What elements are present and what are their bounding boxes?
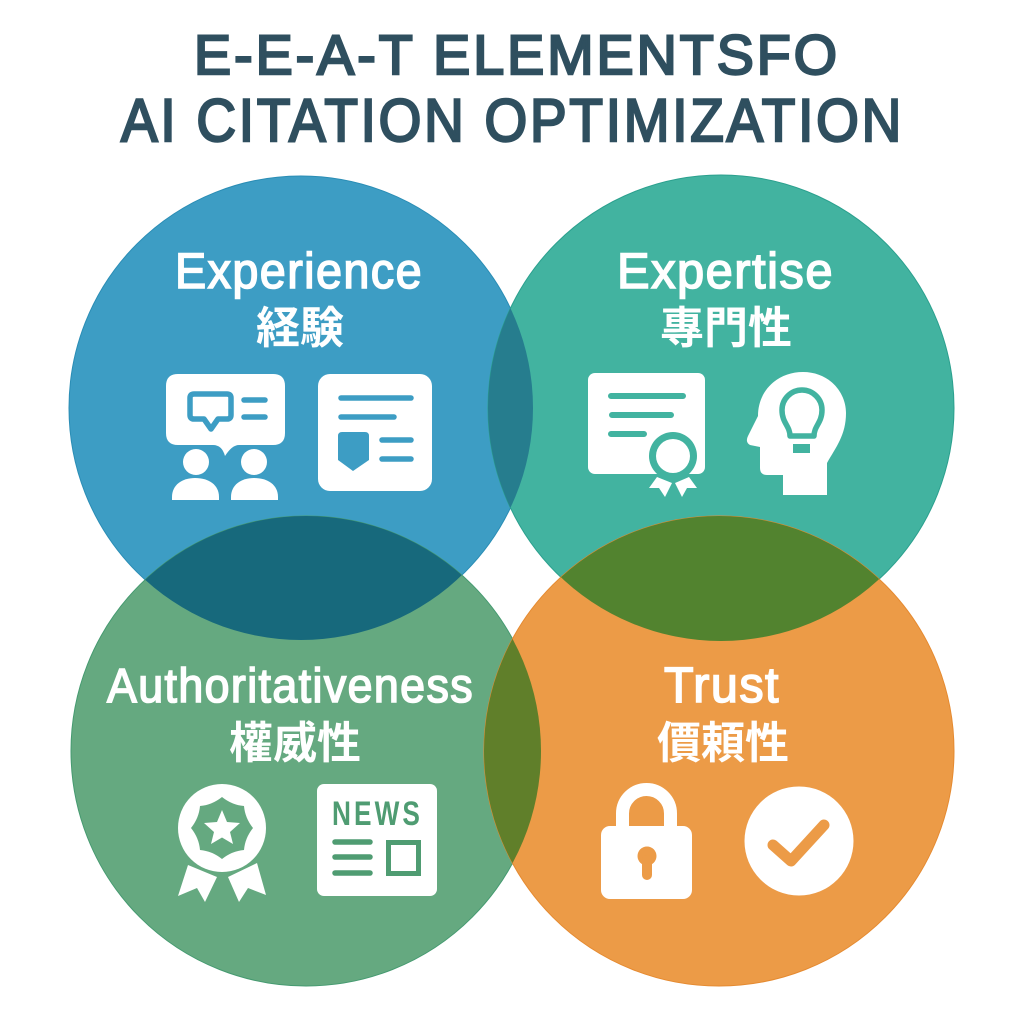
icon: padlock [601, 790, 692, 899]
overlap: Expertise and Trust [561, 516, 879, 641]
heading: Trust Japanese: 價頼性 [657, 719, 789, 768]
icon: newspaper: NEWS [332, 795, 423, 833]
heading: Trust: Trust [664, 657, 780, 713]
panel: Trust [484, 516, 954, 986]
title: E-E-A-T ELEMENTSFO [194, 23, 840, 86]
heading: Authoritativeness Japanese: 權威性 [229, 719, 361, 768]
heading: Authoritativeness: Authoritativeness [107, 660, 474, 713]
overlap: Authoritativeness and Trust [484, 639, 541, 863]
heading: Expertise Japanese: 專門性 [660, 304, 792, 353]
icon: speech bubble with two people [166, 374, 285, 500]
icon: certificate with seal [588, 373, 705, 497]
heading: Expertise: Expertise [617, 243, 834, 299]
heading: Experience Japanese: 経験 [256, 304, 344, 353]
overlap: Experience and Expertise [488, 308, 533, 508]
panel: Experience [69, 176, 533, 640]
icon: head with light bulb [747, 372, 846, 495]
heading: Experience: Experience [175, 243, 423, 299]
title [121, 23, 904, 154]
overlap: Experience and Authoritativeness [145, 516, 462, 640]
icon: check mark circle [744, 786, 854, 896]
title: AI CITATION OPTIMIZATION [121, 87, 904, 154]
panel: Expertise [488, 175, 954, 641]
icon: document with shield [318, 374, 432, 491]
panel: Authoritativeness [71, 516, 541, 986]
icon: medal with star [178, 784, 266, 902]
icon: newspaper [317, 784, 437, 896]
